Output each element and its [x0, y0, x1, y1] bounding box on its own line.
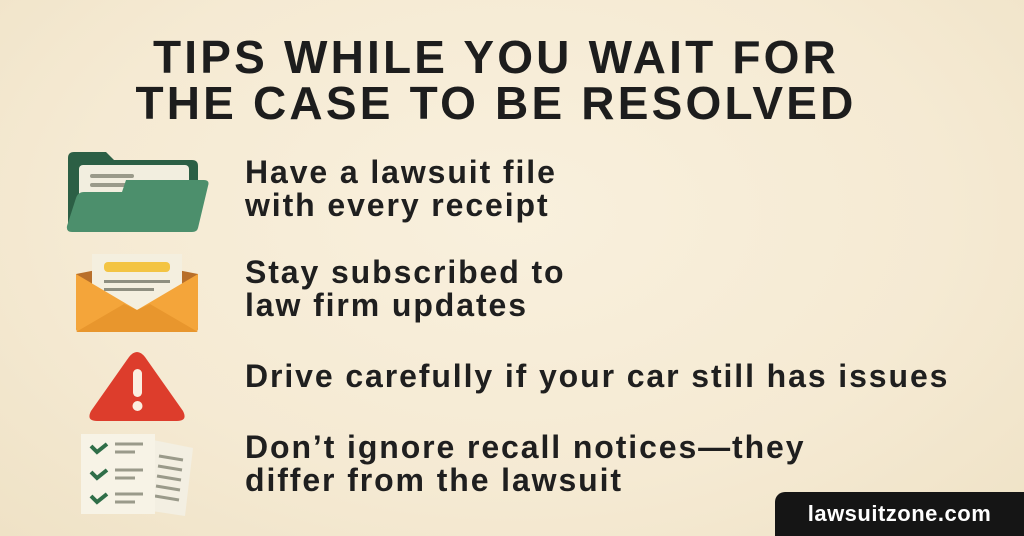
tip 4 text: Don’t ignore recall notices—they: [245, 429, 805, 465]
badge: website: [775, 492, 1024, 536]
tip 4 text: [245, 429, 805, 498]
icon: envelope: [76, 254, 198, 332]
tip 2 text: Stay subscribed to: [245, 254, 566, 290]
icon: folder: [66, 152, 208, 232]
badge: website: lawsuitzone.com: [808, 501, 991, 526]
tip 3 text: Drive carefully if your car still has issues: [245, 358, 949, 394]
tip 1 text: with every receipt: [245, 187, 550, 223]
icon: checklist: [81, 434, 193, 516]
tip 1 text: Have a lawsuit file: [245, 154, 557, 190]
title: THE CASE TO BE RESOLVED: [135, 77, 857, 129]
title: TIPS WHILE YOU WAIT FOR: [153, 31, 839, 83]
tip 2 text: [245, 254, 566, 323]
title: [135, 31, 857, 129]
tip 4 text: differ from the lawsuit: [245, 462, 623, 498]
icon: warning: [89, 352, 185, 421]
tip 2 text: law firm updates: [245, 287, 528, 323]
tip 1 text: [244, 154, 557, 223]
